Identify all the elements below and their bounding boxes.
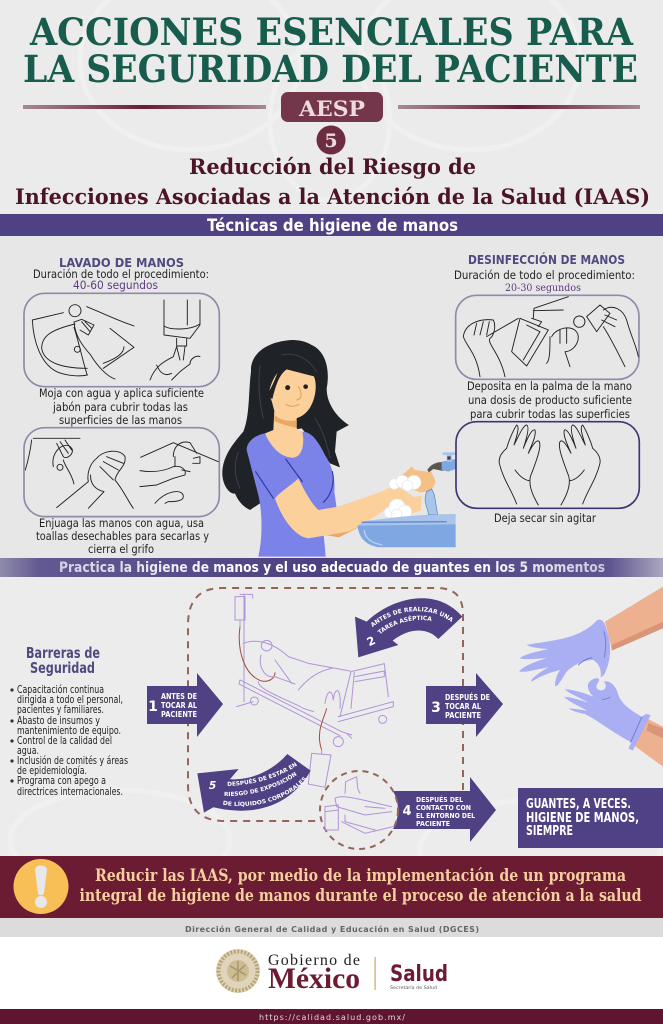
dashed loop around the patient: [188, 588, 463, 821]
step text 1: una dosis de producto suficiente: [468, 393, 632, 407]
banner: conclusion message: [0, 856, 663, 918]
arrow: moment 3: TOCAR AL: [445, 702, 481, 711]
list text: mantenimiento de equipo.: [17, 726, 121, 737]
arrow: moment 1: PACIENTE: [161, 710, 197, 719]
arrow: moment 2: ANTES DE REALIZAR UNA: [371, 606, 453, 628]
footer band with url: https://calidad.salud.gob.mx/: [259, 1013, 405, 1022]
arrow: moment 5: DE LÍQUIDOS CORPORALES: [223, 776, 306, 807]
arrow: moment 1: 1: [148, 699, 158, 715]
panel: lavado de manos: [24, 255, 219, 556]
panel: desinfección de manos: [454, 252, 639, 525]
list text: [17, 684, 128, 798]
footer white area: [0, 937, 663, 1009]
callout: guantes a veces: [518, 788, 663, 848]
step text 2: [36, 516, 209, 556]
step text 1: Deposita en la palma de la mano: [467, 379, 632, 393]
duration text: Duración de todo el procedimiento:: [454, 268, 635, 282]
illustration: patient in hospital bed: [235, 594, 393, 787]
heading: barreras de seguridad: Seguridad: [30, 659, 95, 677]
arrow: moment 4: DESPUÉS DEL: [416, 795, 464, 804]
credit strip: Dirección General de Calidad y Educación en Salud (DGCES): [185, 924, 479, 934]
number 5 badge: 5: [324, 130, 338, 152]
section band: técnicas de higiene de manos: Técnicas de higiene de manos: [207, 216, 458, 235]
arrow: moment 4: EL ENTORNO DEL: [416, 812, 476, 820]
step text 2: toallas desechables para secarlas y: [36, 529, 209, 543]
illustration: open hands drying: [456, 422, 639, 508]
arrow: moment 4: 4: [402, 804, 412, 819]
list text: Capacitación continua: [17, 684, 104, 696]
section band: técnicas de higiene de manos: [0, 214, 663, 236]
icon: national seal: [216, 949, 260, 993]
list text: agua.: [17, 746, 39, 757]
step text 2: Deja secar sin agitar: [494, 511, 596, 525]
list text: de epidemiología.: [17, 765, 87, 777]
arrow: moment 4: CONTACTO CON: [416, 804, 471, 812]
illustration: gloved hands: [519, 587, 663, 767]
title: ACCIONES ESENCIALES PARA: [29, 10, 634, 54]
arrow: moment 3: DESPUÉS DE: [445, 693, 490, 702]
duration value: 40-60 segundos: [73, 278, 158, 292]
heading: barreras de seguridad: [26, 644, 100, 677]
arrow: moment 2: 2: [365, 633, 378, 649]
list text: Programa con apego a: [17, 776, 106, 787]
illustration: dispense product into palm: [456, 295, 639, 379]
list text: directrices internacionales.: [17, 787, 123, 798]
list bullets: [10, 688, 14, 783]
illustration: patient surroundings in dashed circle: [320, 771, 398, 849]
subtitle: [15, 154, 650, 209]
step text 1: Moja con agua y aplica suficiente: [39, 386, 204, 400]
AESP badge with side rules: AESP: [298, 96, 365, 121]
duration text: Duración de todo el procedimiento:: [33, 267, 209, 281]
arrow: moment 5: 5: [209, 779, 216, 792]
wordmark: méxico: México: [268, 962, 360, 995]
heading: barreras de seguridad: Barreras de: [26, 644, 100, 662]
step text 1: para cubrir todas las superficies: [470, 407, 630, 421]
number 5 badge: [316, 126, 346, 154]
step text 2: Enjuaga las manos con agua, usa: [39, 516, 204, 530]
step text 2: cierra el grifo: [88, 542, 154, 556]
arrow: moment 3: PACIENTE: [445, 711, 481, 720]
wordmark: gobierno de: Gobierno de: [268, 952, 360, 969]
title: LA SEGURIDAD DEL PACIENTE: [23, 47, 638, 91]
list text: pacientes y familiares.: [17, 705, 104, 716]
message text: [80, 866, 642, 906]
arrow: moment 1: TOCAR AL: [161, 701, 197, 710]
credit strip: [0, 918, 663, 937]
arrow: moment 4: [392, 777, 496, 842]
AESP badge with side rules: [23, 92, 640, 122]
wordmark: secretaría de salud: Secretaría de Salud: [390, 984, 437, 991]
arrow: moment 5: DESPUÉS DE ESTAR EN: [228, 762, 297, 786]
illustration: woman washing hands: [222, 340, 456, 557]
arrow: moment 5: [197, 754, 311, 812]
logo: gobierno de méxico and salud: [216, 949, 448, 995]
arrow: moment 1: ANTES DE: [161, 692, 197, 701]
illustration: rinse and dry hands: [24, 428, 219, 517]
step text 1: jabón para cubrir todas las: [52, 400, 188, 414]
list text: dirigida a todo el personal,: [17, 695, 123, 706]
step text 1: superficies de las manos: [59, 413, 182, 427]
duration value: 20-30 segundos: [505, 282, 581, 294]
arrow: moment 2: TAREA ASÉPTICA: [377, 615, 432, 634]
arrow: moment 2: [355, 598, 462, 658]
heading: desinfección de manos: DESINFECCIÓN DE MANOS: [468, 252, 625, 267]
divider: [374, 957, 376, 990]
arrow: moment 4: PACIENTE: [416, 820, 450, 828]
illustration: wet hands and apply soap: [24, 293, 219, 387]
footer band with url: [0, 1009, 663, 1024]
arrow: moment 3: 3: [431, 700, 441, 716]
panel: barreras de seguridad: [10, 644, 128, 798]
title: [23, 10, 638, 91]
step text 1: [39, 386, 204, 427]
step text 1: [467, 379, 632, 421]
heading: lavado de manos: LAVADO DE MANOS: [59, 255, 184, 270]
subtitle: Infecciones Asociadas a la Atención de la Salud (IAAS): [15, 184, 650, 209]
arrow: moment 5: RIESGO DE EXPOSICIÓN: [224, 772, 297, 796]
list text: Abasto de insumos y: [17, 716, 100, 727]
subtitle: Reducción del Riesgo de: [189, 154, 476, 179]
list text: Inclusión de comités y áreas: [17, 755, 128, 767]
icon: warning exclamation: [14, 859, 68, 914]
callout: guantes a veces: SIEMPRE: [526, 824, 573, 839]
list text: Control de la calidad del: [17, 736, 112, 747]
arrow: moment 3: [426, 673, 503, 737]
arrow: moment 1: [147, 673, 223, 737]
wordmark: salud: Salud: [390, 962, 448, 987]
